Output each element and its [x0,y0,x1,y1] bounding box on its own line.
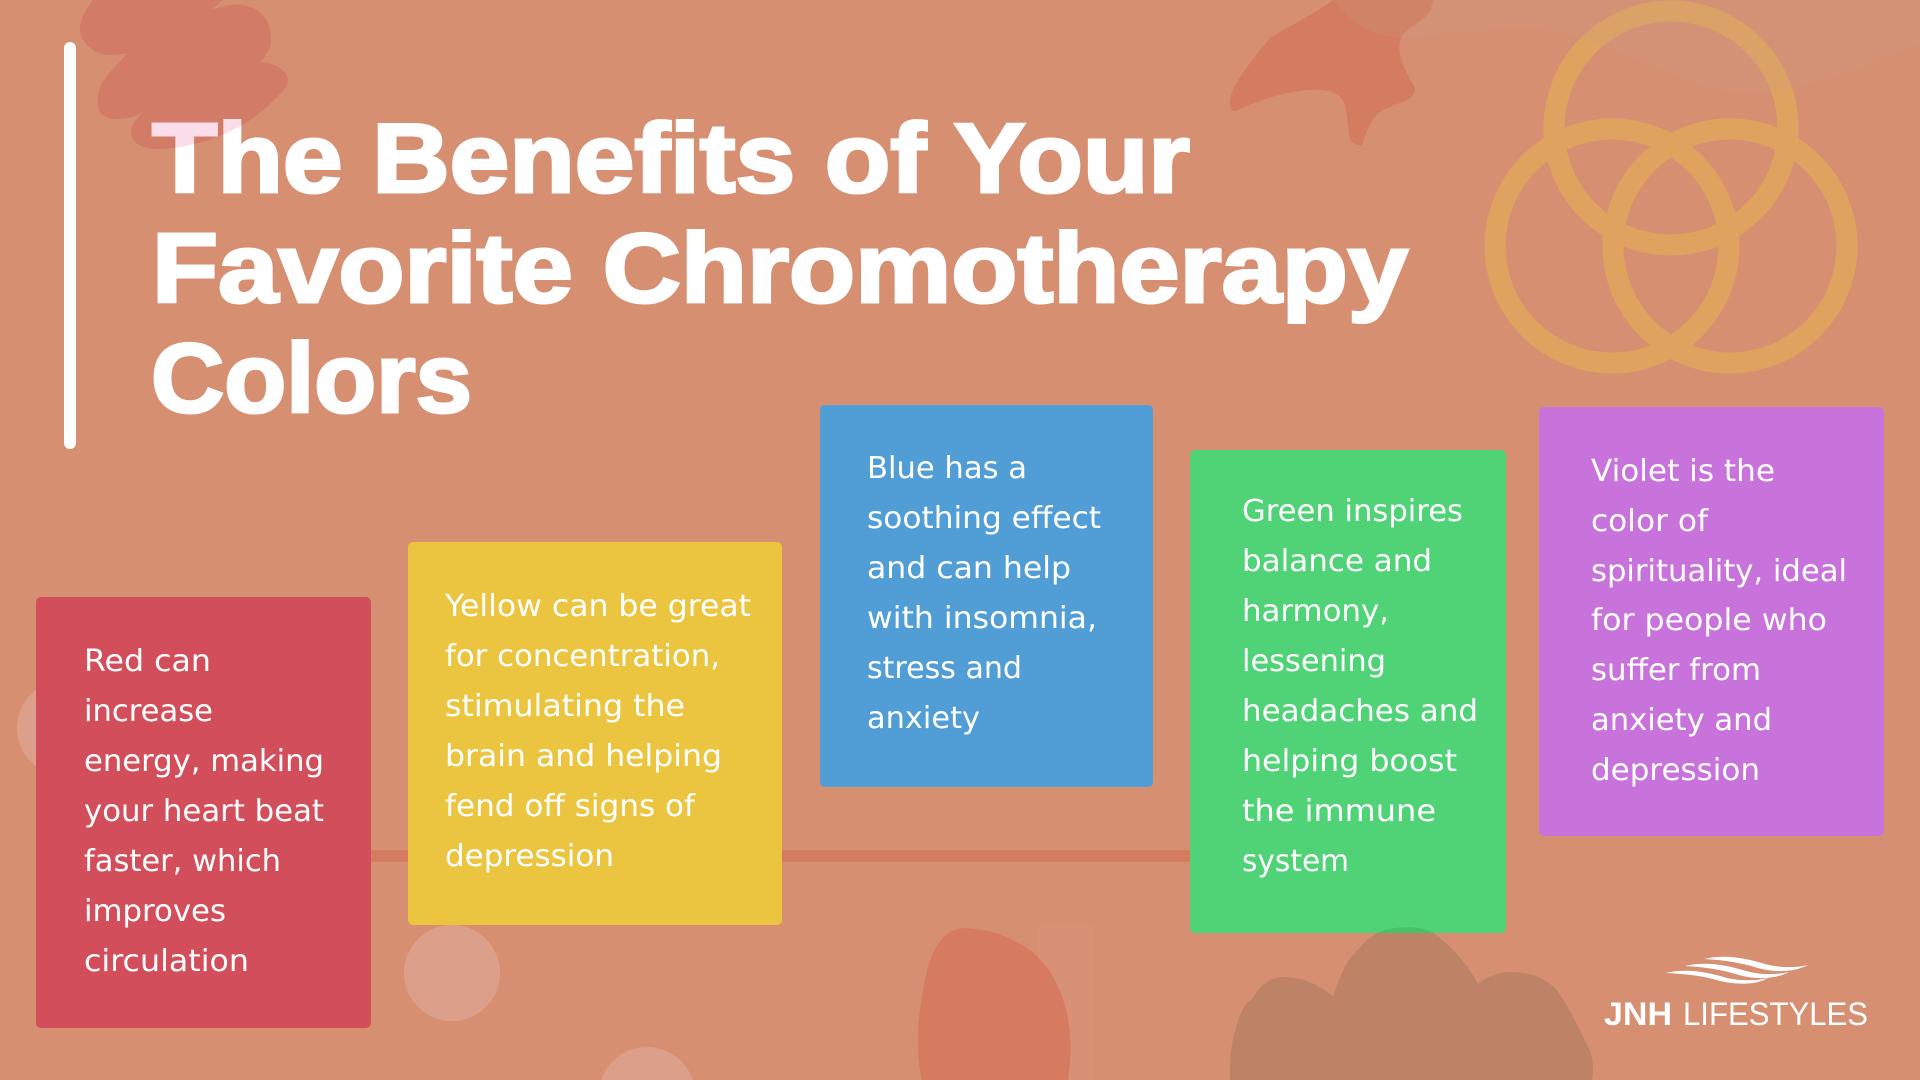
card: green [1190,450,1506,933]
timeline line [36,850,1190,862]
decorative circle: bottom left [404,925,500,1021]
card: yellow: Yellow can be great [444,589,751,624]
logo waves [1666,957,1808,984]
card: green: system [1242,844,1349,879]
card: yellow: stimulating the [445,689,685,724]
card: red: improves [84,894,226,929]
card: blue: Blue has a [867,451,1027,486]
card: violet: depression [1591,753,1760,788]
accent bar [64,42,76,449]
organic blob: top left, multiplied over title [80,0,288,149]
card: green: the immune [1242,794,1436,829]
logo [1604,957,1868,1032]
card: violet: color of [1591,504,1709,539]
card: yellow [408,542,782,925]
card: red: Red can [84,644,211,679]
card: blue: stress and [867,651,1022,686]
card: yellow: brain and helping [445,739,722,774]
logo wordmark: LIFESTYLES: LIFESTYLES [1683,996,1868,1032]
card: green: lessening [1242,644,1386,679]
card: blue: and can help [867,551,1071,586]
card: red: faster, which [84,844,281,879]
card: violet: for people who [1591,603,1827,638]
card: violet: anxiety and [1591,703,1772,738]
card: yellow: depression [445,839,614,874]
card: blue [820,405,1153,787]
card: violet: spirituality, ideal [1591,554,1847,589]
title: Colors [151,323,472,433]
card: yellow: fend off signs of [445,789,696,824]
card: blue: with insomnia, [867,601,1097,636]
card: red: energy, making [84,744,324,779]
organic blob: bottom centre [918,928,1071,1080]
card: green: balance and [1242,544,1432,579]
card: green: Green inspires [1242,494,1463,529]
card: blue: soothing effect [867,501,1101,536]
title: The Benefits of Your [152,103,1190,213]
decorative circle: bottom centre [601,1047,693,1080]
card: blue: anxiety [867,701,980,736]
card: green: harmony, [1242,594,1389,629]
card: green: headaches and [1242,694,1478,729]
title [151,103,1408,433]
card: red: circulation [84,944,249,979]
card: yellow: for concentration, [445,639,720,674]
card: violet: Violet is the [1591,454,1775,489]
translucent wave: top right [1336,0,1920,93]
organic leaf: top [1230,0,1433,145]
card: green: helping boost [1242,744,1457,779]
three overlapping rings icon [1495,11,1847,363]
logo wordmark: JNH: JNH [1604,996,1672,1032]
card: red: your heart beat [84,794,324,829]
card: red: increase [84,694,213,729]
card: violet: suffer from [1591,653,1761,688]
organic shape: bottom mountains, multiplied over green card [1230,927,1593,1080]
title: Favorite Chromotherapy [152,213,1408,323]
card: red [36,597,371,1028]
decorative circle: left [17,680,113,776]
card: violet [1539,407,1884,836]
faint rectangle: bottom [1038,925,1093,1080]
